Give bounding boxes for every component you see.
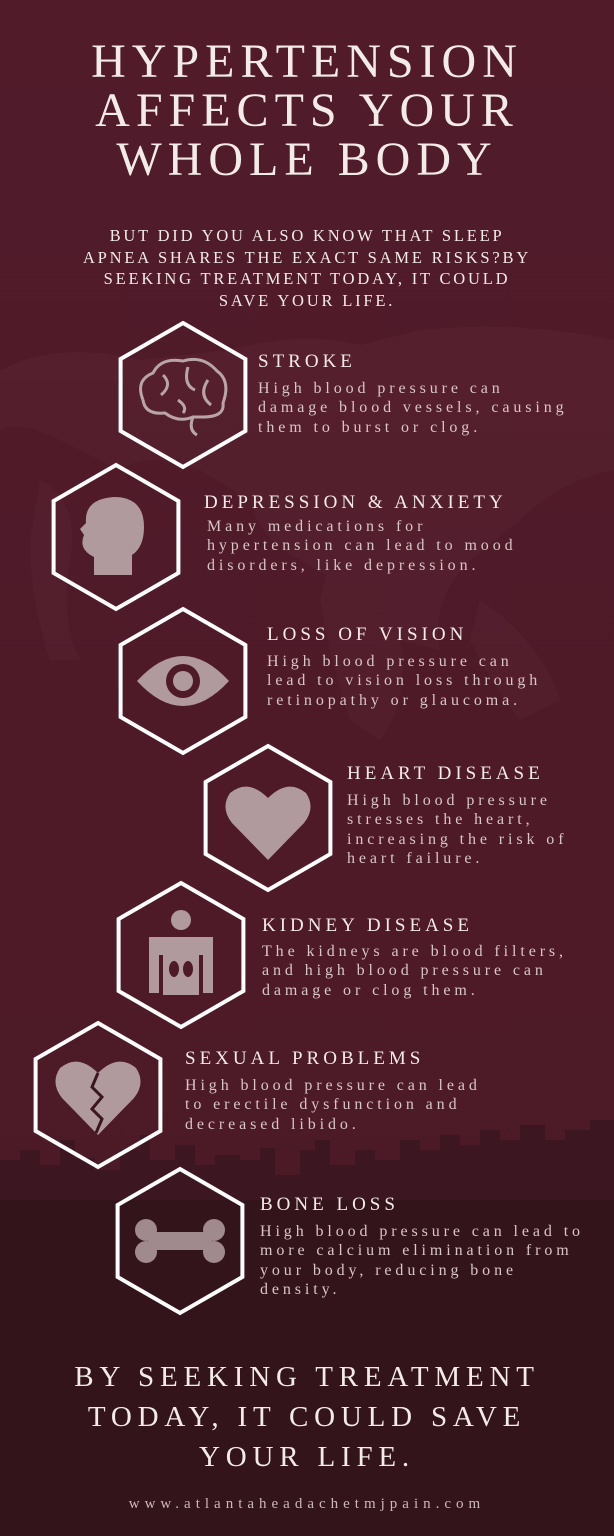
item: heart: increasing the risk of [347,831,567,848]
title [91,35,523,186]
footer call to action [74,1361,540,1473]
icon: eye [121,609,245,753]
item: sexual: SEXUAL PROBLEMS [185,1048,424,1069]
subtitle: APNEA SHARES THE EXACT SAME RISKS?BY [83,248,531,266]
item: kidney: and high blood pressure can [262,962,547,979]
item: sexual: decreased libido. [185,1116,360,1133]
item: depression: hypertension can lead to mood [207,537,516,554]
footer call to action: BY SEEKING TREATMENT [74,1361,540,1393]
icon: bone [118,1169,242,1313]
item: depression [204,492,516,574]
footer call to action: YOUR LIFE. [199,1441,415,1473]
item: stroke: them to burst or clog. [258,419,481,436]
item: heart: heart failure. [347,850,483,867]
item: sexual: to erectile dysfunction and [185,1096,460,1113]
item: depression: Many medications for [207,518,426,535]
title: WHOLE BODY [116,133,498,186]
subtitle: SEEKING TREATMENT TODAY, IT COULD [104,269,510,288]
item: bone: BONE LOSS [260,1194,399,1215]
footer call to action: TODAY, IT COULD SAVE [88,1401,526,1433]
website url: www.atlantaheadachetmjpain.com [129,1496,485,1512]
item: heart: High blood pressure [347,792,551,809]
item: vision [267,624,541,709]
item: stroke: STROKE [258,351,356,372]
item: bone: your body, reducing bone [260,1262,517,1279]
item: kidney [262,915,567,999]
item: kidney: damage or clog them. [262,982,479,999]
title: AFFECTS YOUR [95,84,519,137]
item: sexual [185,1048,481,1133]
item: vision: retinopathy or glaucoma. [267,692,521,709]
icon: head [54,465,178,609]
item: sexual: High blood pressure can lead [185,1077,481,1094]
item: bone: density. [260,1281,340,1298]
subtitle [83,226,531,310]
item: kidney: KIDNEY DISEASE [262,915,473,936]
item: stroke [258,351,568,436]
item: vision: LOSS OF VISION [267,624,467,645]
item: depression: DEPRESSION & ANXIETY [204,492,507,513]
subtitle: BUT DID YOU ALSO KNOW THAT SLEEP [110,226,504,245]
subtitle: SAVE YOUR LIFE. [219,290,395,310]
item: bone: more calcium elimination from [260,1242,573,1259]
item: heart [347,763,567,867]
item: vision: lead to vision loss through [267,672,541,689]
icon: brain [121,323,245,467]
item: depression: disorders, like depression. [207,557,479,574]
item: stroke: High blood pressure can [258,380,504,397]
icon: broken heart [36,1023,160,1167]
item: vision: High blood pressure can [267,653,513,670]
icon: kidney body [119,883,243,1027]
item: kidney: The kidneys are blood filters, [262,943,567,960]
item: heart: stresses the heart, [347,811,534,828]
title: HYPERTENSION [91,35,523,88]
item: heart: HEART DISEASE [347,763,544,784]
item: bone: High blood pressure can lead to [260,1223,584,1240]
icon: heart [206,746,330,890]
item: stroke: damage blood vessels, causing [258,399,568,416]
item: bone [260,1194,584,1298]
